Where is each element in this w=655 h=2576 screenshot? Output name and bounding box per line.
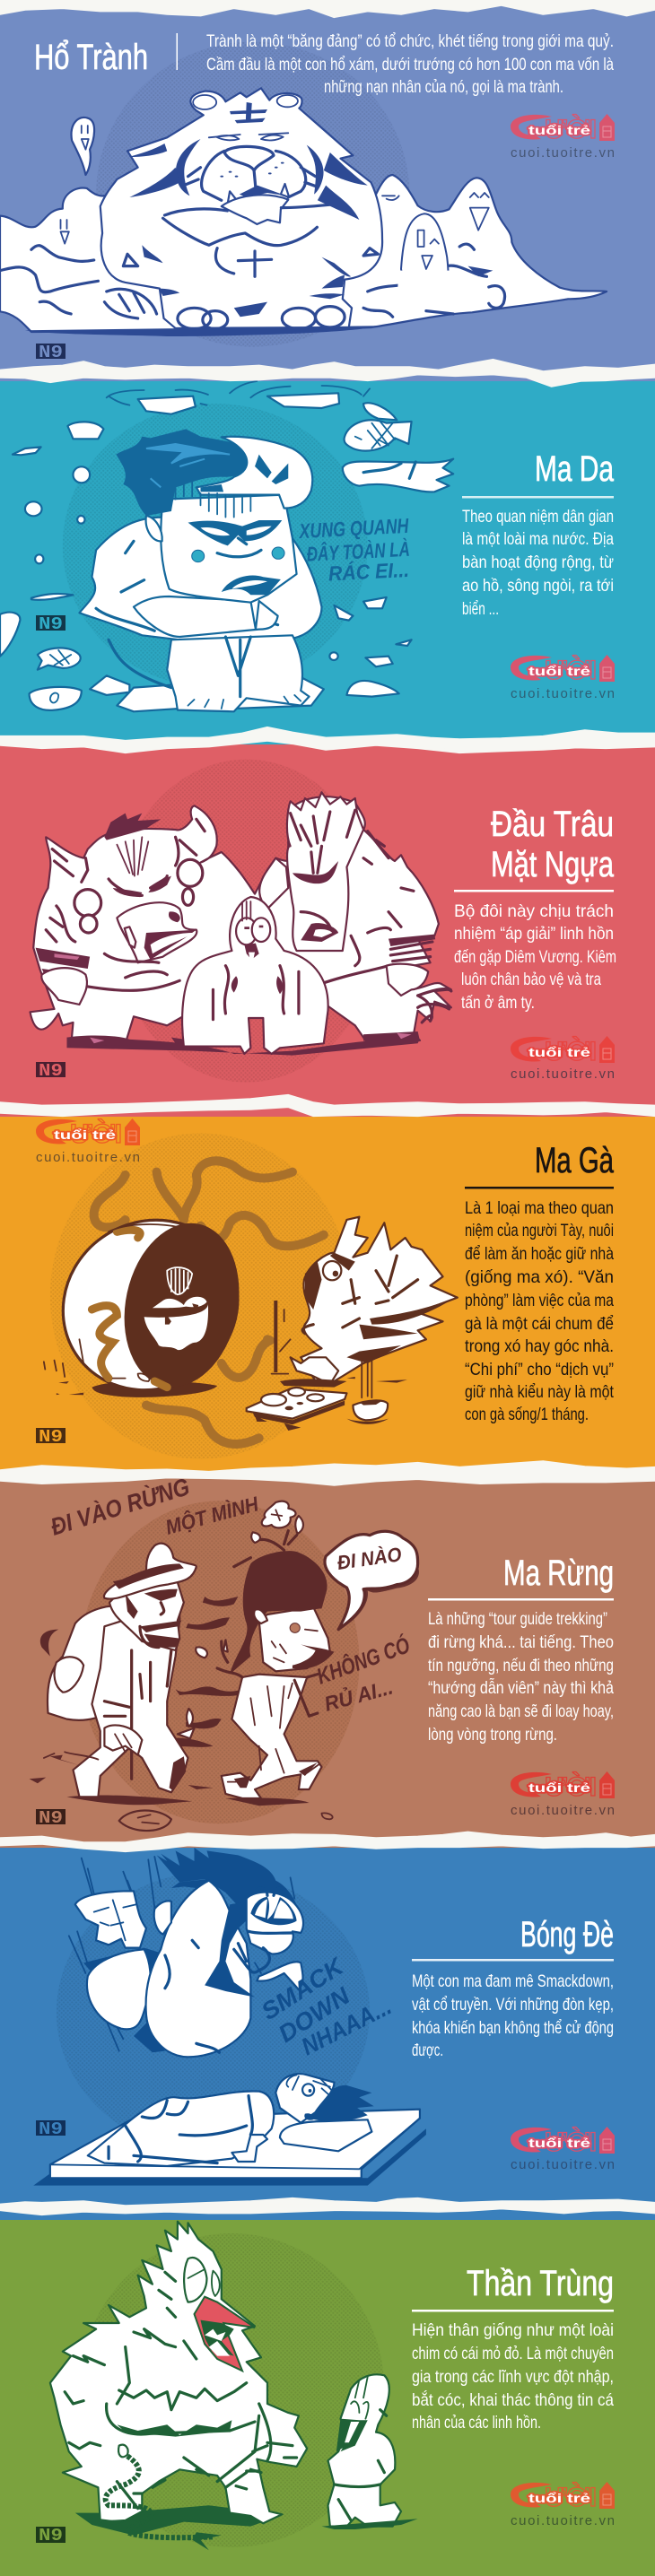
artist mark N9: N9: [39, 1808, 63, 1828]
logo: Cười Tuổi Trẻ: ƯỜI: [545, 2127, 597, 2157]
description text: phòng” làm việc của ma: [465, 1291, 614, 1310]
speech text: ĐÂY TOÀN LÀ: [306, 536, 410, 566]
hand-lettered speech text: MỘT MÌNH: [162, 1491, 261, 1539]
illustration: wrestling ghost falling on sleeper: [33, 1848, 426, 2186]
title rule: [465, 1187, 614, 1189]
dotted backdrop ellipse: [50, 1133, 351, 1459]
logo: Cười Tuổi Trẻ: cuoi.tuoitre.vn: [511, 2513, 615, 2528]
logo: Cười Tuổi Trẻ: [511, 2482, 615, 2528]
speech text: Smack Down Nhaaa: DOWN: [274, 1982, 355, 2048]
artist mark N9: N9: [39, 1061, 63, 1081]
artist mark N9: N9: [39, 2119, 63, 2139]
title: Đầu Trâu Mặt Ngựa: Đầu Trâu: [491, 805, 614, 844]
description text: [454, 901, 616, 1013]
panel: Ma Gà: [0, 1117, 655, 1480]
artist mark N9: [36, 1427, 66, 1447]
panel: Bóng Đè: [0, 1848, 655, 2224]
description text: được.: [412, 2041, 443, 2060]
hand-lettered speech text: KHÔNG CÓ: [313, 1631, 414, 1690]
illustration: trekker followed by forest ghost: [30, 1501, 419, 1831]
logo: Cười Tuổi Trẻ: cuoi.tuoitre.vn: [36, 1150, 140, 1165]
title: Ma Da: Ma Da: [535, 449, 615, 489]
speech text: RÁC EI...: [328, 557, 410, 586]
title: Đầu Trâu Mặt Ngựa: [491, 805, 615, 884]
description text: nhiệm “áp giải” linh hồn: [454, 924, 614, 944]
hand-lettered speech text: ĐI NÀO: [336, 1543, 403, 1574]
dotted backdrop ellipse: [79, 2233, 384, 2547]
description text: “Chi phí” cho “dịch vụ”: [465, 1360, 614, 1379]
logo: Cười Tuổi Trẻ: tuổi trẻ: [528, 2491, 590, 2505]
artist mark N9: [36, 1808, 66, 1828]
logo: Cười Tuổi Trẻ: cuoi.tuoitre.vn: [511, 1066, 615, 1082]
dotted backdrop ellipse: [113, 760, 380, 1083]
logo: Cười Tuổi Trẻ: [511, 114, 615, 161]
title: Thần Trùng: Thần Trùng: [467, 2264, 614, 2303]
title rule: [462, 496, 614, 499]
logo: Cười Tuổi Trẻ: cuoi.tuoitre.vn: [511, 686, 615, 701]
title rule: [428, 1598, 614, 1600]
description text: lòng vòng trong rừng.: [428, 1725, 557, 1745]
logo: Cười Tuổi Trẻ: tuổi trẻ: [528, 1780, 590, 1795]
description text: [206, 31, 614, 97]
speech text: Smack Down Nhaaa: SMACK: [257, 1952, 350, 2025]
panel: Hổ Trành: [0, 0, 655, 386]
logo: Cười Tuổi Trẻ: ƯỜI: [545, 114, 597, 144]
description text: [465, 1198, 614, 1424]
logo: Cười Tuổi Trẻ: [511, 655, 615, 701]
description text: tấn ở âm ty.: [461, 993, 535, 1013]
description text: [462, 507, 614, 619]
description text: con gà sống/1 tháng.: [465, 1405, 589, 1424]
artist mark N9: N9: [39, 1427, 63, 1447]
logo: Cười Tuổi Trẻ: [511, 1771, 615, 1818]
title rule: [412, 1959, 614, 1961]
description text: luôn chân bảo vệ và tra: [461, 970, 601, 989]
illustration: sad drowned man with floating trash: [0, 381, 453, 711]
logo: Cười Tuổi Trẻ: cuoi.tuoitre.vn: [511, 145, 615, 161]
description text: để làm ăn hoặc giữ nhà: [465, 1244, 614, 1264]
dotted backdrop ellipse: [96, 42, 409, 347]
description text: biển ...: [462, 599, 499, 619]
artist mark N9: N9: [39, 343, 63, 362]
description text: là một loài ma nước. Địa: [462, 529, 614, 549]
title rule: [454, 890, 614, 892]
title: Hổ Trành: Hổ Trành: [34, 38, 148, 77]
description text: Bộ đôi này chịu trách: [454, 901, 614, 921]
title: Đầu Trâu Mặt Ngựa: Mặt Ngựa: [491, 845, 615, 884]
logo: Cười Tuổi Trẻ: ƯỜI: [70, 1118, 122, 1149]
description text: Theo quan niệm dân gian: [462, 507, 614, 527]
description text: bàn hoạt động rộng, từ: [462, 553, 614, 572]
logo: Cười Tuổi Trẻ: [511, 2127, 615, 2172]
logo: Cười Tuổi Trẻ: ƯỜI: [545, 655, 597, 685]
dotted backdrop ellipse: [79, 1501, 359, 1823]
description text: gia trong các lĩnh vực đột nhập,: [412, 2367, 614, 2387]
description text: những nạn nhân của nó, gọi là ma trành.: [324, 77, 563, 97]
logo: Cười Tuổi Trẻ: ƯỜI: [545, 2482, 597, 2512]
description text: gà là một cái chum để: [465, 1314, 614, 1334]
dotted backdrop ellipse: [57, 1872, 370, 2153]
logo: Cười Tuổi Trẻ: [511, 1036, 615, 1082]
title rule: [412, 2310, 614, 2312]
description text: Hiện thân giống như một loài: [412, 2320, 614, 2340]
description text: đi rừng khá... tai tiếng. Theo: [428, 1632, 614, 1652]
artist mark N9: N9: [39, 2526, 63, 2546]
speech text: Smack Down Nhaaa: [257, 1952, 396, 2060]
hand-lettered speech text: RỦ AI...: [321, 1675, 396, 1716]
panel: Đầu Trâu Mặt Ngựa: [0, 744, 655, 1121]
description text: ao hồ, sông ngòi, ra tới: [462, 576, 614, 596]
illustration: haunted jar, smoke and frightened rooster: [42, 1161, 458, 1444]
logo: Cười Tuổi Trẻ: [36, 1118, 140, 1165]
logo: Cười Tuổi Trẻ: cuoi.tuoitre.vn: [511, 2157, 615, 2172]
logo: Cười Tuổi Trẻ: ƯỜI: [545, 1036, 597, 1066]
artist mark N9: [36, 343, 66, 362]
description text: Là 1 loại ma theo quan: [465, 1198, 614, 1218]
description text: trong xó hay góc nhà.: [465, 1336, 614, 1356]
speech text: [297, 514, 412, 587]
description text: (giống ma xó). “Văn: [465, 1267, 614, 1287]
logo: Cười Tuổi Trẻ: tuổi trẻ: [54, 1127, 116, 1142]
logo: Cười Tuổi Trẻ: cuoi.tuoitre.vn: [511, 1803, 615, 1818]
logo: Cười Tuổi Trẻ: tuổi trẻ: [528, 1045, 590, 1059]
artist mark N9: N9: [39, 614, 63, 634]
illustration: tiger and ghosts: [0, 88, 607, 336]
hand-lettered speech text: [48, 1472, 414, 1716]
logo: Cười Tuổi Trẻ: tuổi trẻ: [528, 123, 590, 137]
artist mark N9: [36, 2119, 66, 2139]
artist mark N9: [36, 2526, 66, 2546]
hand-lettered speech text: ĐI VÀO RỪNG: [48, 1472, 193, 1541]
title divider: [176, 33, 178, 70]
panel: Ma Da: [0, 381, 655, 749]
description text: nhân của các linh hồn.: [412, 2413, 541, 2432]
description text: giữ nhà kiểu này là một: [465, 1382, 614, 1402]
illustration: feathered demon and kneeling man: [50, 2222, 418, 2550]
description text: [412, 2320, 614, 2432]
description text: [412, 1971, 614, 2060]
dotted backdrop ellipse: [63, 404, 368, 688]
description text: [428, 1609, 614, 1745]
title: Ma Gà: Ma Gà: [535, 1141, 615, 1180]
panel: Ma Rừng: [0, 1472, 655, 1852]
artist mark N9: [36, 614, 66, 634]
description text: bắt cóc, khai thác thông tin cá: [412, 2389, 614, 2410]
title: Ma Rừng: Ma Rừng: [503, 1553, 614, 1593]
speech text: XUNG QUANH: [297, 514, 409, 543]
description text: “hướng dẫn viên” này thì khả: [428, 1677, 614, 1698]
panel: Thần Trùng: [0, 2220, 655, 2576]
illustration: ox-head and horse-face guards with ghost: [31, 792, 451, 1056]
artist mark N9: [36, 1061, 66, 1081]
logo: Cười Tuổi Trẻ: tuổi trẻ: [528, 664, 590, 678]
speech text: Smack Down Nhaaa: NHAAA...: [297, 1993, 396, 2060]
logo: Cười Tuổi Trẻ: tuổi trẻ: [528, 2136, 590, 2150]
logo: Cười Tuổi Trẻ: ƯỜI: [545, 1771, 597, 1802]
